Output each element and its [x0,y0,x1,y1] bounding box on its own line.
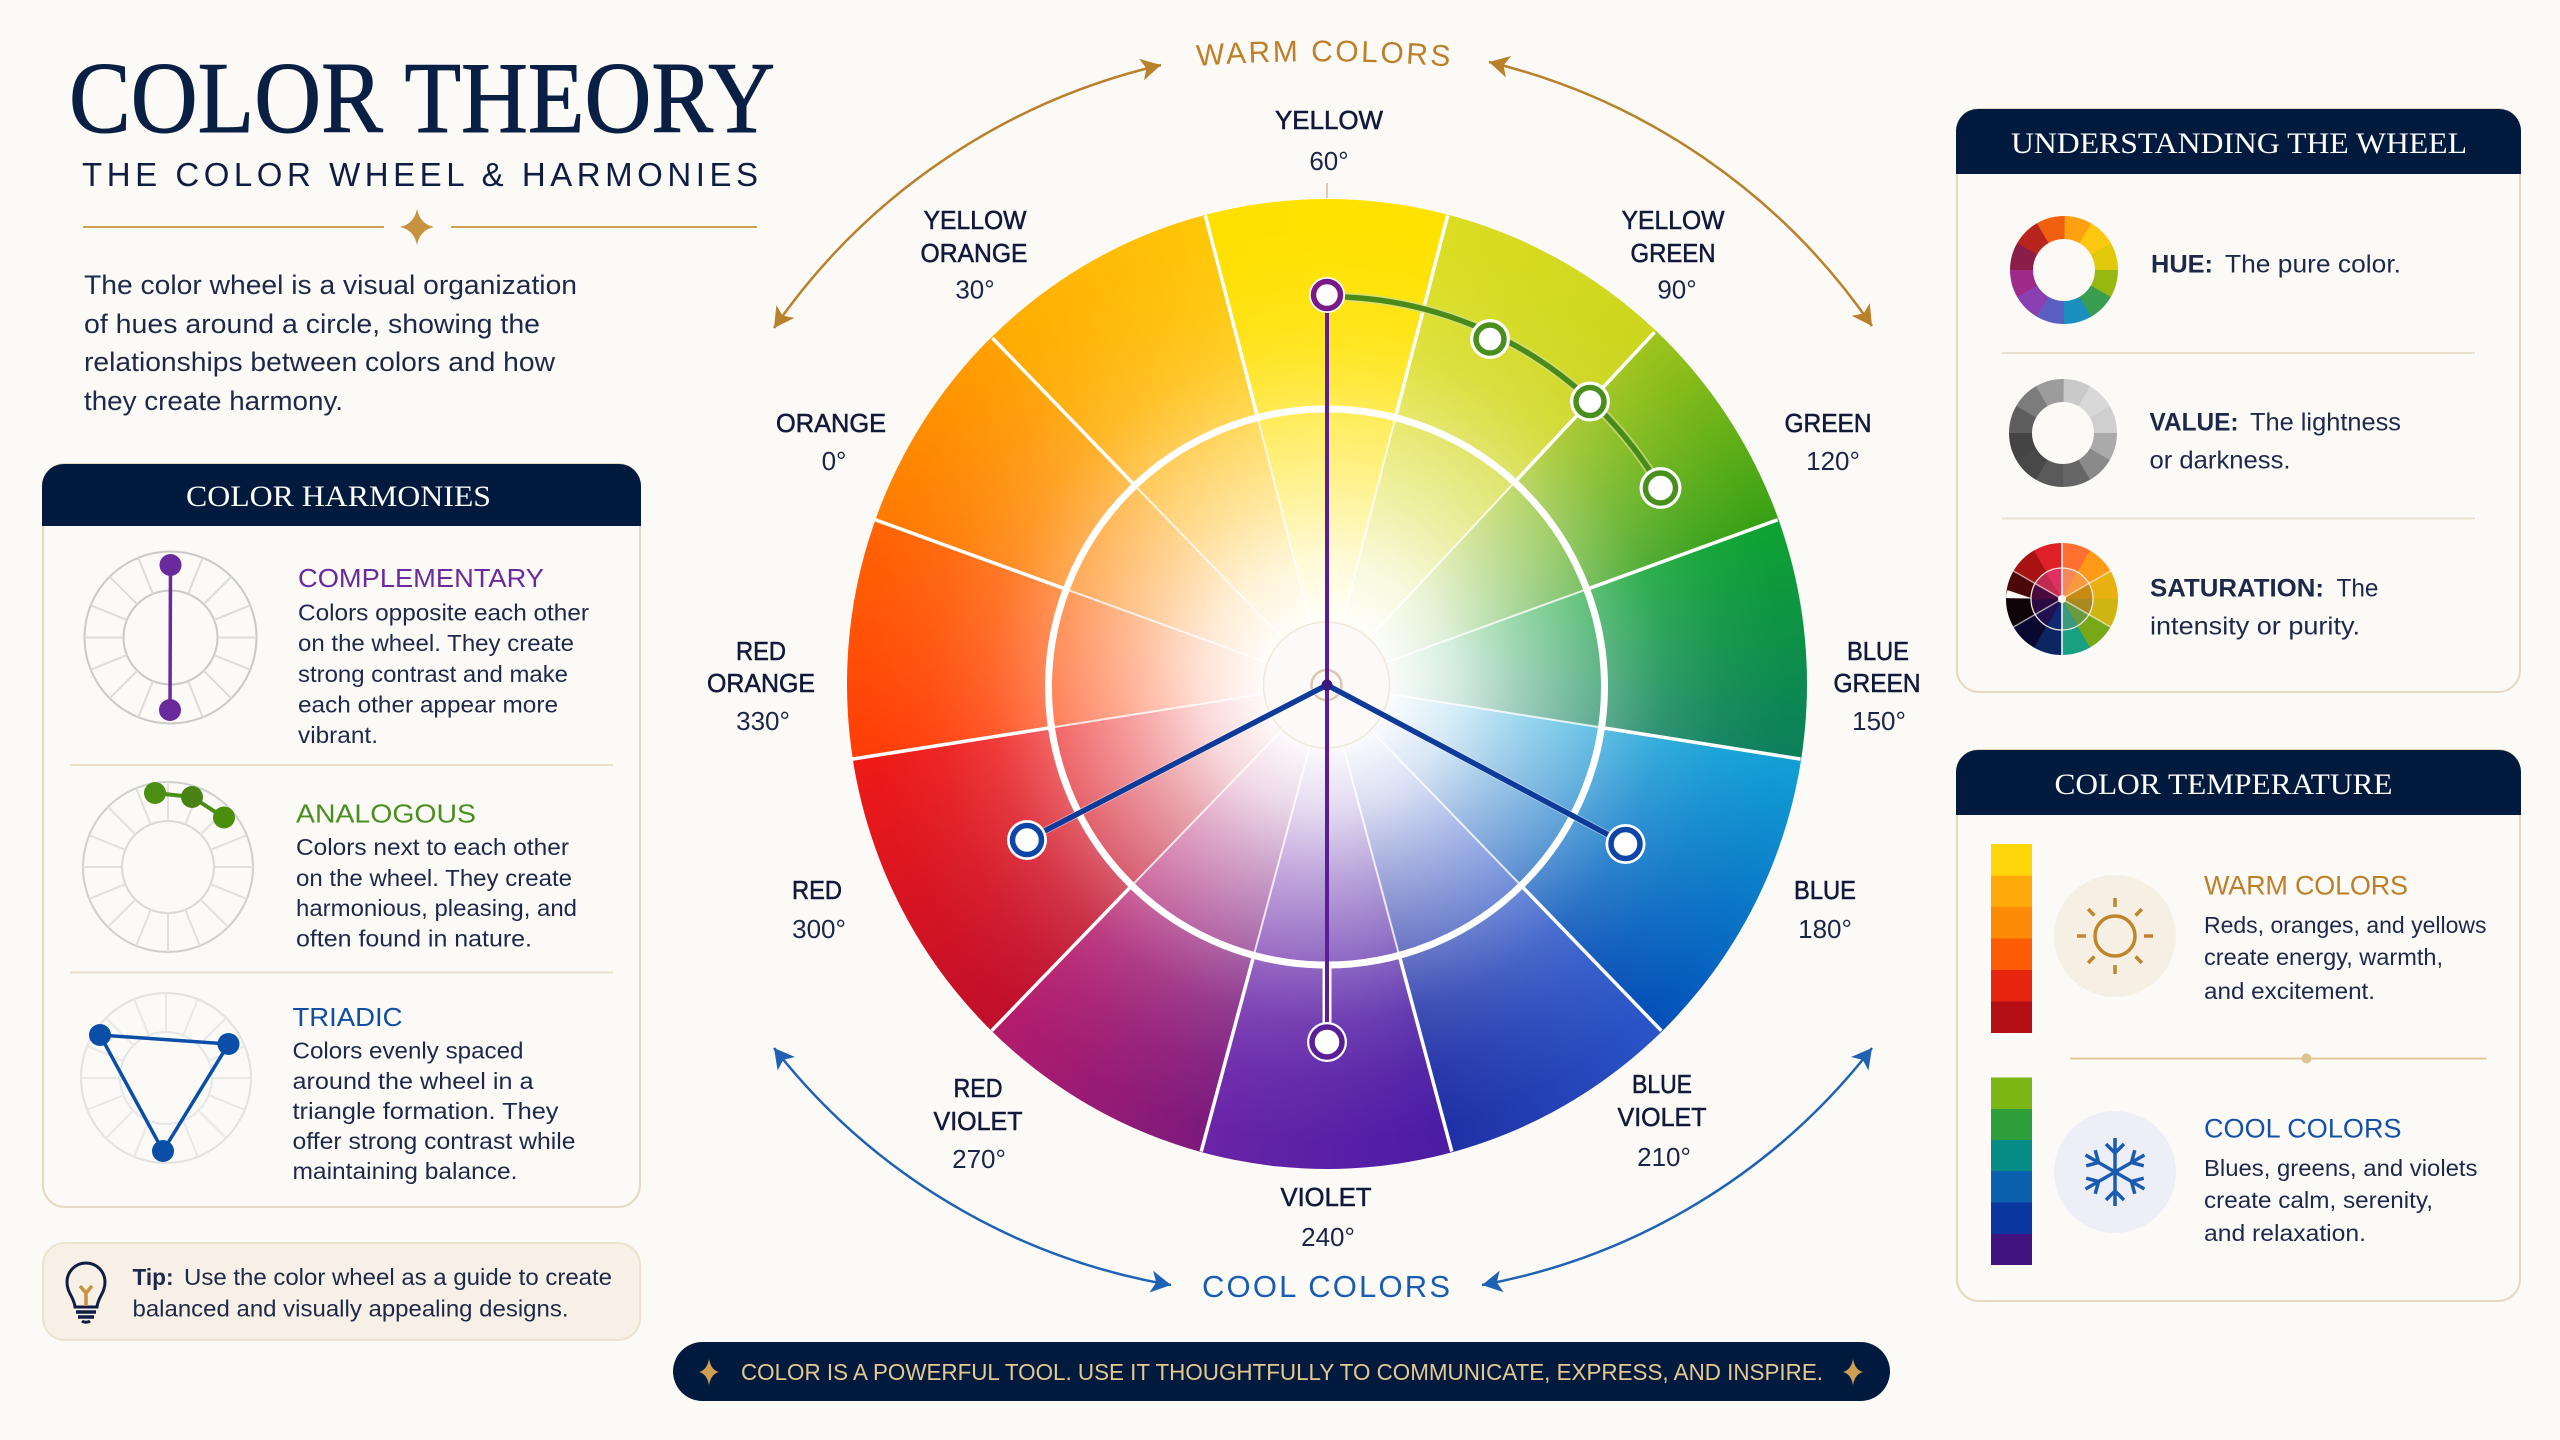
arrow: warm right [1489,62,1872,326]
arrow: cool left [774,1048,1171,1285]
label: yellow orange: ORANGE [920,238,1028,268]
label: red orange [707,636,815,736]
label: blue violet: 210° [1637,1142,1691,1172]
text: complementary: on the wheel. They create [298,630,574,656]
label: yellow green: GREEN [1630,238,1716,268]
tip text: Tip: [132,1264,174,1290]
tip text: Use the color wheel as a guide to create [184,1264,612,1290]
label: green: GREEN [1784,408,1872,438]
icon: star right [1843,1359,1863,1385]
text: triadic: TRIADIC [292,1002,402,1032]
text: triadic: maintaining balance. [292,1158,518,1184]
label: yellow orange: 30° [955,274,995,304]
text: cool colors: Blues, greens, and violets [2204,1155,2478,1181]
text: warm colors: Reds, oranges, and yellows [2204,912,2486,938]
label: red: 300° [792,914,846,944]
text: cool colors [2204,1114,2478,1246]
label: red [792,875,846,944]
text: complementary: each other appear more [298,692,558,718]
text: value: VALUE: [2150,408,2238,436]
label: red orange: RED [736,636,786,666]
text: analogous: often found in nature. [296,926,532,952]
label: yellow: 60° [1309,146,1349,176]
text: saturation: SATURATION: [2150,574,2324,602]
label: yellow green [1622,205,1725,304]
panel: color harmonies [42,464,641,1207]
text: complementary: vibrant. [298,722,378,748]
label: violet [1280,1182,1372,1252]
text: value [2150,408,2401,474]
label: blue green: 150° [1852,706,1906,736]
text: analogous: ANALOGOUS [296,798,476,828]
subtitle: THE COLOR WHEEL & HARMONIES [82,156,758,193]
text: cool colors: and relaxation. [2204,1220,2366,1246]
intro text: they create harmony. [84,386,343,416]
intro text: relationships between colors and how [84,347,556,377]
wheel structure lines [852,183,1801,1152]
label: violet: VIOLET [1280,1182,1372,1212]
intro text [84,270,577,416]
cool swatch strip [1991,1078,2032,1265]
harmony: complementary line [1307,277,1347,1062]
temperature divider [2070,1054,2486,1064]
label: red violet [934,1073,1023,1174]
label: yellow orange [920,205,1028,304]
text: warm colors: create energy, warmth, [2204,944,2443,970]
arrow: cool right [1482,1048,1872,1285]
text: triadic: Colors evenly spaced [292,1038,524,1064]
text: complementary [298,563,589,748]
text: saturation: The [2336,574,2378,602]
label: blue [1794,875,1856,944]
label: yellow green: 90° [1657,274,1697,304]
arrow: warm left [774,65,1161,328]
title divider with star [83,209,757,245]
label: blue violet: VIOLET [1618,1102,1707,1132]
label: yellow: YELLOW [1275,105,1383,135]
text: hue: HUE: [2151,250,2213,278]
icon: star left [699,1359,719,1385]
panel: understanding the wheel [1956,109,2521,692]
text: triadic [292,1002,576,1184]
label: blue green [1834,636,1920,736]
label: orange [776,408,886,476]
color wheel [846,199,1806,1169]
label: orange: 0° [822,446,846,476]
warm colors heading: WARM COLORS [1196,40,1449,66]
text: analogous [296,798,577,952]
label: green: 120° [1806,446,1860,476]
icon: light bulb [67,1263,105,1322]
text: saturation [2150,574,2378,640]
label: red: RED [792,875,842,905]
icon: hue ring [2022,228,2106,312]
text: warm colors [2204,870,2486,1004]
panel: color temperature [1956,750,2521,1301]
label: red orange: ORANGE [707,668,815,698]
label: blue green: GREEN [1834,668,1920,698]
intro text: of hues around a circle, showing the [84,309,540,339]
heading: color harmonies [42,464,641,526]
tip text [132,1264,612,1322]
diagram: analogous [83,782,253,952]
text: analogous: harmonious, pleasing, and [296,895,577,921]
label: red violet: VIOLET [934,1106,1023,1136]
icon: sun [2054,875,2176,997]
label: red violet: 270° [952,1144,1006,1174]
text: value: or darkness. [2150,446,2290,474]
text: triadic: triangle formation. They [292,1098,559,1124]
label: violet: 240° [1301,1222,1355,1252]
text: complementary: strong contrast and make [298,661,568,687]
heading: understanding the wheel [1956,109,2521,174]
text: hue [2151,250,2401,278]
label: green [1784,408,1872,476]
text: analogous: Colors next to each other [296,834,569,860]
text: value: The lightness [2250,408,2401,436]
diagram: complementary [84,552,256,724]
text: cool colors: COOL COLORS [2204,1114,2402,1144]
text: triadic: around the wheel in a [292,1068,534,1094]
icon: value ring [2020,390,2106,476]
icon: saturation wheel [2014,543,2110,655]
label: red violet: RED [954,1073,1002,1103]
heading: color temperature: COLOR TEMPERATURE [2054,768,2392,801]
title: COLOR THEORY [69,42,775,155]
label: blue: 180° [1798,914,1852,944]
label: yellow orange: YELLOW [924,205,1027,235]
label: yellow green: YELLOW [1622,205,1725,235]
text: analogous: on the wheel. They create [296,865,572,891]
text: warm colors: and excitement. [2204,978,2375,1004]
text: saturation: intensity or purity. [2150,612,2360,640]
text: warm colors: WARM COLORS [2204,870,2408,900]
text: complementary: Colors opposite each other [298,600,589,626]
label: blue green: BLUE [1847,636,1909,666]
heading: color harmonies: COLOR HARMONIES [186,480,491,513]
label: orange: ORANGE [776,408,886,438]
harmony: analogous arc [1345,297,1682,509]
icon: snowflake [2054,1111,2176,1233]
harmony: triadic lines [1007,680,1646,864]
footer banner [673,1342,1890,1401]
label: red orange: 330° [736,706,790,736]
footer text: COLOR IS A POWERFUL TOOL. USE IT THOUGHTFULLY TO COMMUNICATE, EXPRESS, AND INSPIRE. [741,1359,1823,1385]
text: cool colors: create calm, serenity, [2204,1187,2433,1213]
tip callout [43,1243,640,1340]
label: blue violet [1618,1069,1707,1172]
diagram: triadic [81,993,251,1163]
text: complementary: COMPLEMENTARY [298,563,544,593]
wheel labels [707,105,1920,1252]
tip text: balanced and visually appealing designs. [132,1296,568,1322]
label: blue: BLUE [1794,875,1856,905]
warm swatch strip [1991,844,2032,1033]
label: blue violet: BLUE [1632,1069,1692,1099]
label: yellow [1275,105,1383,176]
text: hue: The pure color. [2225,250,2401,278]
intro text: The color wheel is a visual organization [84,270,577,300]
text: triadic: offer strong contrast while [292,1128,576,1154]
cool colors heading: COOL COLORS [1202,1269,1450,1304]
heading: color temperature [1956,750,2521,815]
heading: understanding the wheel: UNDERSTANDING THE WHEEL [2011,127,2467,160]
